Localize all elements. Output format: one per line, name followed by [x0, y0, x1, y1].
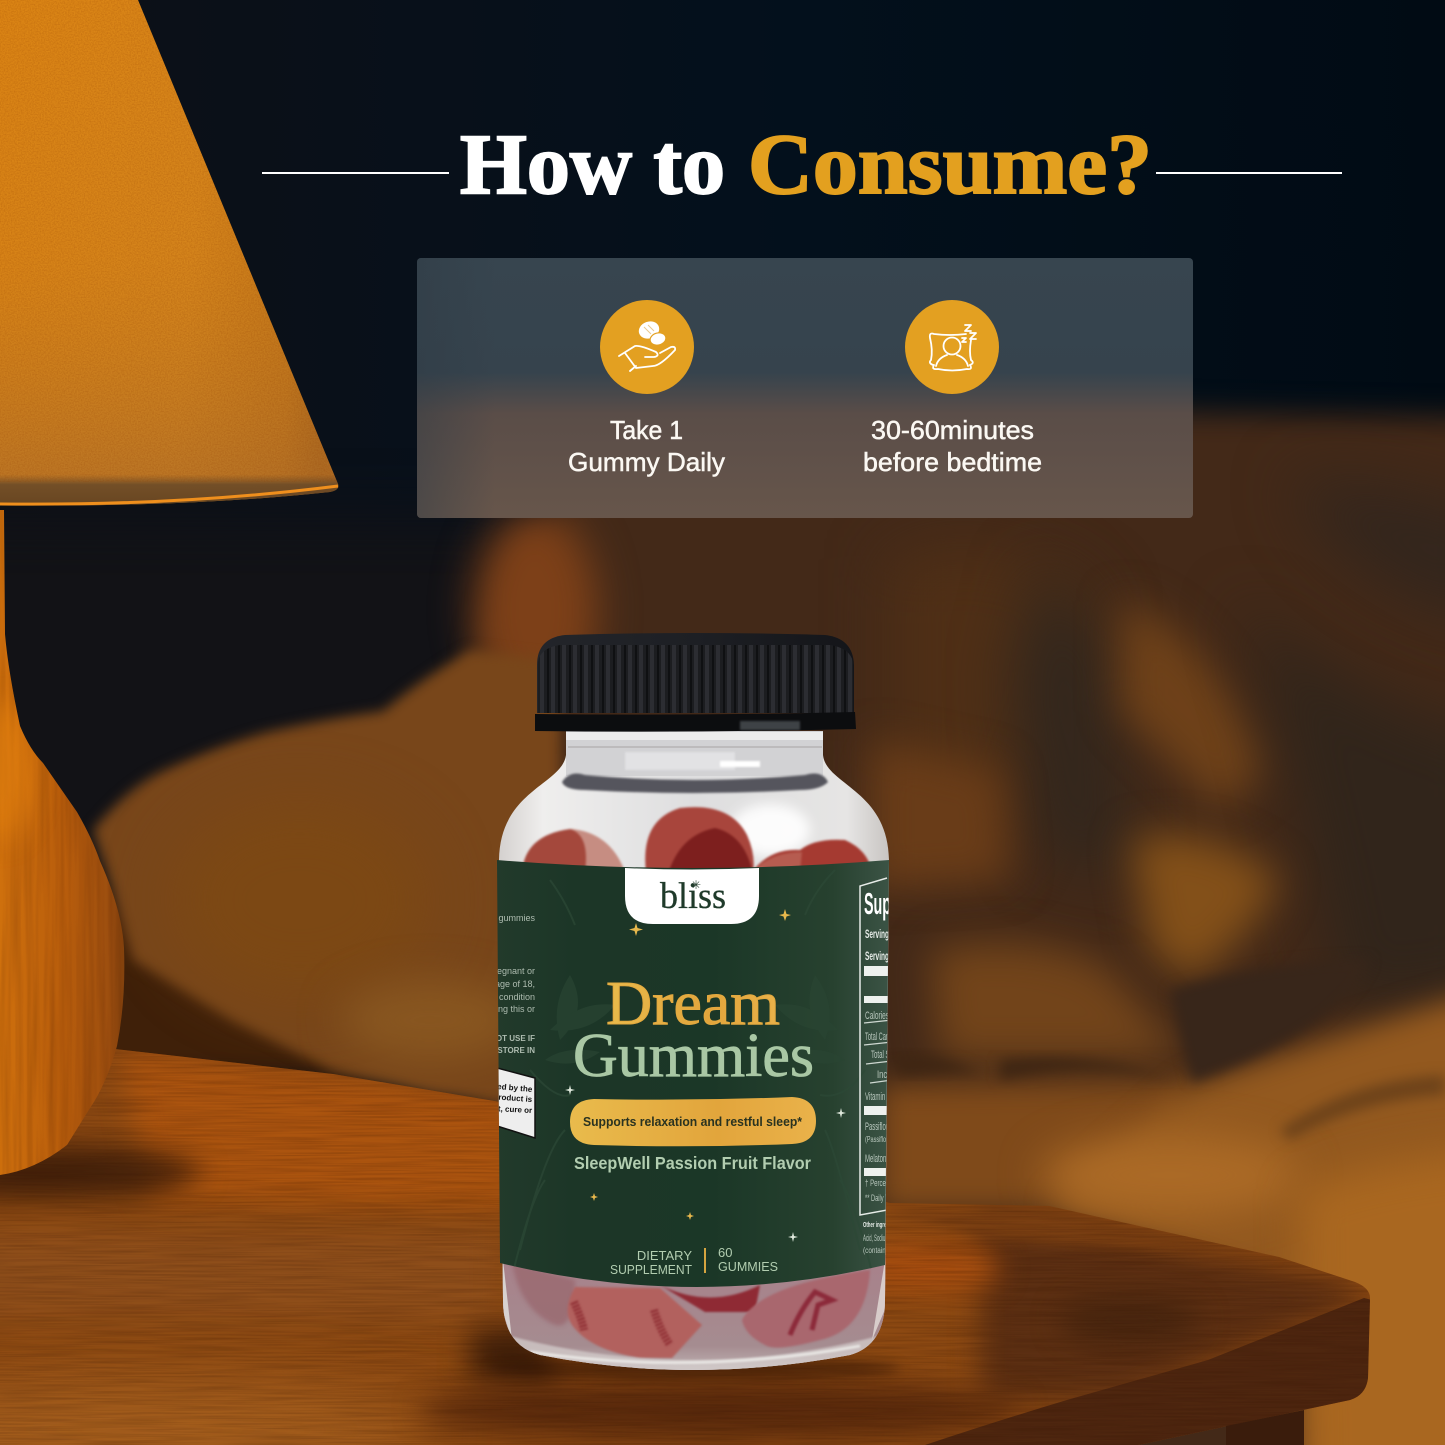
label footer: SUPPLEMENT [610, 1262, 692, 1277]
label left side text: 1.39 gummies [478, 913, 535, 923]
label left side text: re using this or [476, 1004, 535, 1014]
logo tab: bliss [625, 868, 759, 924]
panel: usage instructions [417, 258, 1193, 518]
label title: Dream Gummies: Dream [606, 970, 780, 1038]
lamp base [0, 505, 130, 1185]
label left side text: SING. STORE IN [473, 1046, 535, 1055]
title: Consume? [748, 116, 1152, 212]
gummies bottom [502, 1255, 886, 1370]
table front face [925, 1298, 1372, 1445]
text: 30-60 minutes before bedtime: before bedtime [863, 447, 1042, 477]
label footer: DIETARY [637, 1248, 692, 1263]
logo tab: bliss: ✳ [691, 878, 701, 892]
label left side text: the age of 18, [480, 979, 535, 989]
icon: hand holding gummies [600, 300, 694, 394]
bottle shadow [490, 1357, 900, 1379]
label left side text: ise, Pregnant or [471, 966, 535, 976]
label white disclaimer box: reat, cure or [486, 1104, 532, 1115]
label title: Dream Gummies: Gummies [573, 1022, 814, 1090]
supplement facts panel: Total Carb [865, 1031, 891, 1043]
supplement facts panel: Melatonin [865, 1153, 891, 1165]
label white disclaimer box [498, 1068, 536, 1139]
label left side text: ARE NOT USE IF [471, 1034, 535, 1043]
bed and blankets [470, 405, 1445, 1445]
label title: Dream Gummies [573, 970, 814, 1090]
supplement facts panel: Acid, Sodium [863, 1233, 889, 1243]
label footer: GUMMIES [718, 1259, 778, 1274]
supplement facts panel: Serving [865, 927, 889, 941]
logo tab: bliss: bliss [660, 876, 726, 917]
sparkles [590, 909, 791, 1220]
label pill: supports relaxation [570, 1097, 816, 1146]
gummies top [522, 807, 872, 874]
table leg [1226, 1410, 1304, 1445]
icon: sleeping on pillow [905, 300, 999, 394]
lamp shade [0, 0, 345, 510]
text: 30-60 minutes before bedtime [863, 415, 1042, 477]
table [0, 1030, 1445, 1445]
supplement facts panel: † Percent [865, 1178, 891, 1188]
label flavor text: SleepWell Passion Fruit Flavor [574, 1153, 811, 1173]
bottle glass [495, 731, 895, 1385]
supplement facts panel: (Passiflora [865, 1135, 891, 1144]
supplement facts panel: Serving [865, 949, 889, 963]
text: 30-60 minutes before bedtime: 30-60minutes [871, 415, 1034, 445]
supplement facts panel: (contains [863, 1246, 889, 1255]
product: gummy bottle: Sup [864, 886, 891, 921]
title [262, 116, 1342, 212]
supplement facts panel: Incl [877, 1069, 889, 1081]
title: How to [460, 116, 725, 212]
cap [535, 633, 856, 732]
label [497, 860, 889, 1287]
label white disclaimer box: his product is [480, 1091, 533, 1104]
supplement facts panel [860, 878, 893, 1255]
label left side text [498, 914, 535, 1053]
left pillow [80, 650, 560, 1110]
label footer [610, 1245, 778, 1277]
product: gummy bottle [471, 633, 895, 1385]
text: take 1 gummy daily: Gummy Daily [568, 447, 725, 477]
label pill: supports relaxation: Supports relaxation and restful sleep* [583, 1114, 803, 1129]
label footer: 60 [718, 1245, 732, 1260]
label white disclaimer box: uted by the [489, 1081, 533, 1094]
supplement facts panel: Total Su [871, 1049, 893, 1061]
leaf decorations [546, 976, 612, 1064]
label left side text: dical condition [478, 992, 535, 1002]
supplement facts panel: Vitamin B [865, 1091, 891, 1103]
supplement facts panel: Other ingred [863, 1220, 889, 1229]
text: take 1 gummy daily: Take 1 [610, 415, 683, 445]
supplement facts panel: Calories [865, 1010, 889, 1022]
supplement facts panel: Passiflora [865, 1121, 891, 1133]
text: take 1 gummy daily [568, 415, 725, 477]
supplement facts panel: ** Daily V [865, 1193, 889, 1203]
